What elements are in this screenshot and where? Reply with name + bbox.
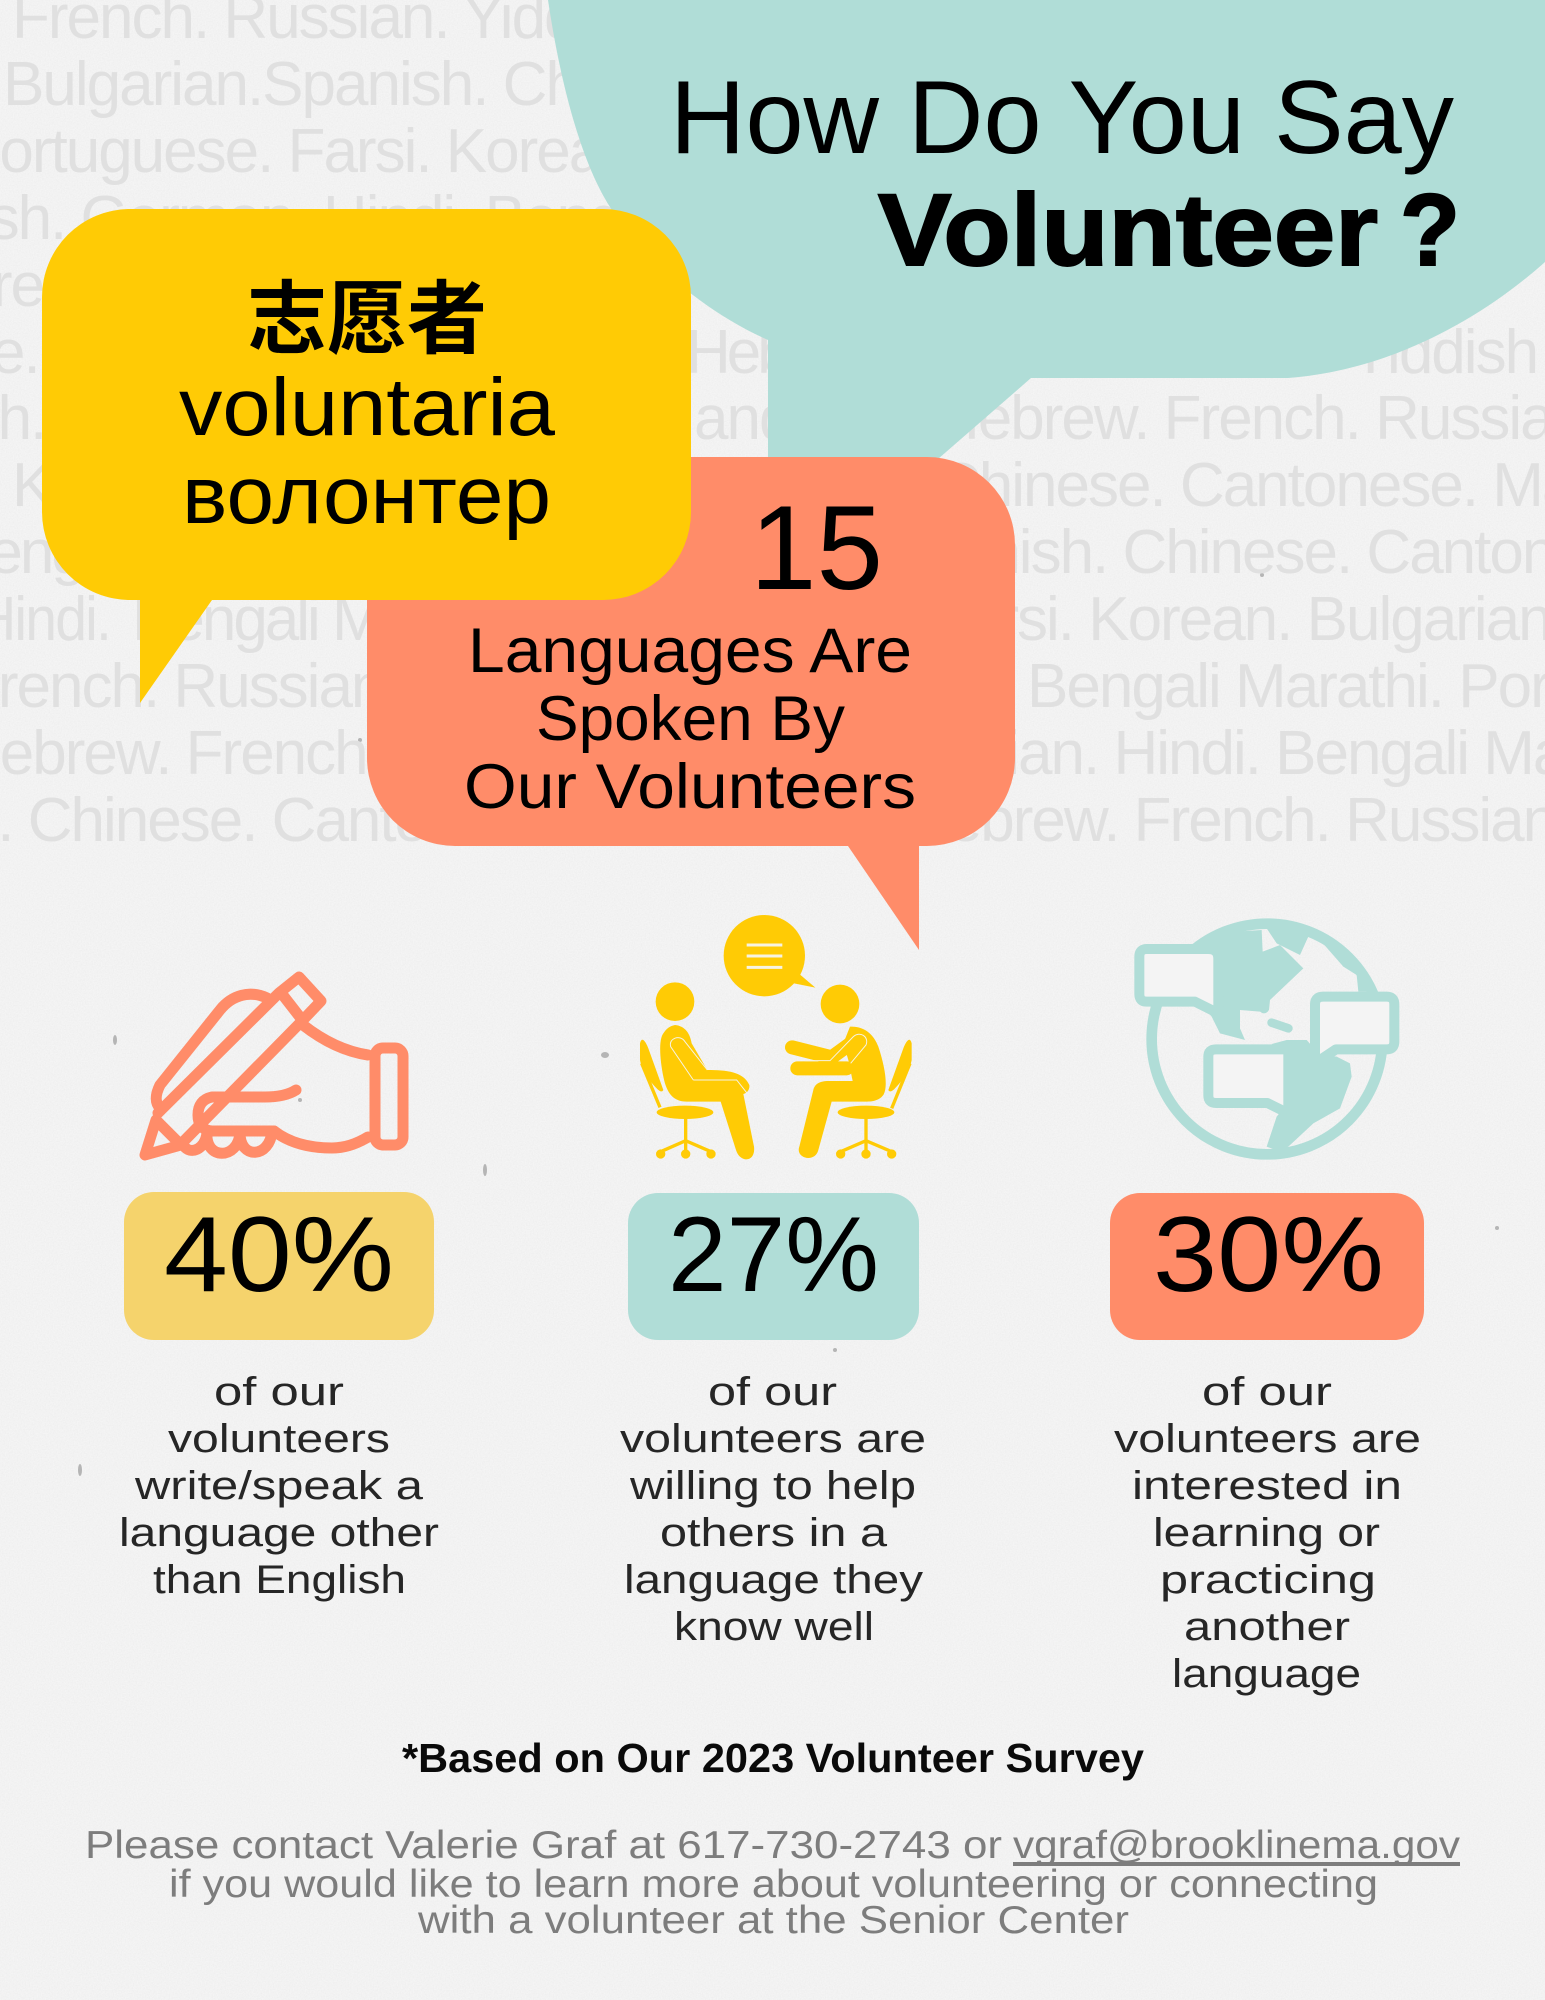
translations of volunteer: волонтер <box>182 450 551 541</box>
text: 40% description <box>119 1370 439 1602</box>
text: 40% description: of our <box>214 1370 344 1414</box>
text: 40% description: language other <box>119 1511 439 1555</box>
text: 30% description: interested in <box>1132 1464 1402 1508</box>
languages statement: Spoken By <box>536 684 845 754</box>
stat pill: 27% <box>628 1193 919 1340</box>
icon: hand writing with pencil <box>145 977 403 1155</box>
text: 27% description: others in a <box>660 1511 888 1555</box>
background language word pattern: Farsi. Korean. Bulgarian <box>930 585 1545 654</box>
text: 40% description: volunteers <box>168 1417 390 1461</box>
text: 27% description: of our <box>708 1370 837 1414</box>
text: 30% description: language <box>1172 1652 1361 1696</box>
contact text: with a volunteer at the Senior Center <box>417 1899 1129 1942</box>
text: 30% description <box>1114 1370 1421 1696</box>
background language word pattern: and <box>694 384 791 453</box>
stat pill: 30% <box>1110 1193 1424 1340</box>
languages statement: Languages Are <box>468 616 912 686</box>
languages statement: Our Volunteers <box>464 752 916 822</box>
text: 40% description: than English <box>153 1558 406 1602</box>
left seated person <box>640 982 754 1159</box>
text: 40% description: write/speak a <box>134 1464 424 1508</box>
title: ? <box>1400 173 1460 287</box>
text: 27% description <box>620 1370 926 1649</box>
speech balloon <box>724 915 815 996</box>
background language word pattern: Yiddish <box>1350 318 1537 387</box>
text: 30% description: practicing <box>1160 1558 1376 1602</box>
translations of volunteer: voluntaria <box>179 362 555 453</box>
icon: globe with speech bubbles <box>1139 910 1400 1154</box>
background language word pattern <box>0 0 1545 855</box>
title: Volunteer <box>878 173 1378 287</box>
title: How Do You Say <box>670 60 1454 176</box>
stat pill: 30%: 30% <box>1153 1194 1384 1314</box>
languages statement <box>464 616 916 822</box>
panel: translations speech bubble <box>42 209 691 703</box>
text: 30% description: volunteers are <box>1114 1417 1421 1461</box>
text: 27% description: language they <box>624 1558 923 1602</box>
text: 27% description: volunteers are <box>620 1417 926 1461</box>
translations of volunteer: 志愿者 <box>247 275 487 364</box>
stat pill: 40% <box>124 1192 434 1340</box>
panel: 15 languages speech bubble <box>367 457 1015 950</box>
text: 27% description: know well <box>674 1605 874 1649</box>
contact text <box>85 1824 1461 1942</box>
text: 30% description: another <box>1184 1605 1350 1649</box>
icon: two people talking on chairs <box>640 915 912 1159</box>
text: 27% description: willing to help <box>629 1464 916 1508</box>
number 15: 15 <box>750 481 883 615</box>
background language word pattern: Hebrew. <box>686 318 885 387</box>
background language word pattern: Korean <box>12 451 200 520</box>
text: 30% description: learning or <box>1153 1511 1380 1555</box>
text: 30% description: of our <box>1202 1370 1332 1414</box>
survey note: *Based on Our 2023 Volunteer Survey <box>402 1735 1144 1781</box>
right seated person <box>792 985 912 1159</box>
background language word pattern: Bengali Marathi <box>132 585 518 654</box>
stat pill: 40%: 40% <box>164 1194 394 1314</box>
panel: title speech bubble <box>548 0 1545 480</box>
background language word pattern: Bulgarian.Spanish. Chinese <box>3 50 716 119</box>
translations of volunteer <box>179 275 555 541</box>
stat pill: 27%: 27% <box>668 1194 879 1314</box>
contact text: Please contact Valerie Graf at 617-730-2743 or <box>85 1824 1002 1867</box>
contact text: vgraf@brooklinema.gov <box>1013 1824 1461 1867</box>
contact text: if you would like to learn more about volunteering or connecting <box>169 1863 1378 1906</box>
title <box>670 60 1460 287</box>
